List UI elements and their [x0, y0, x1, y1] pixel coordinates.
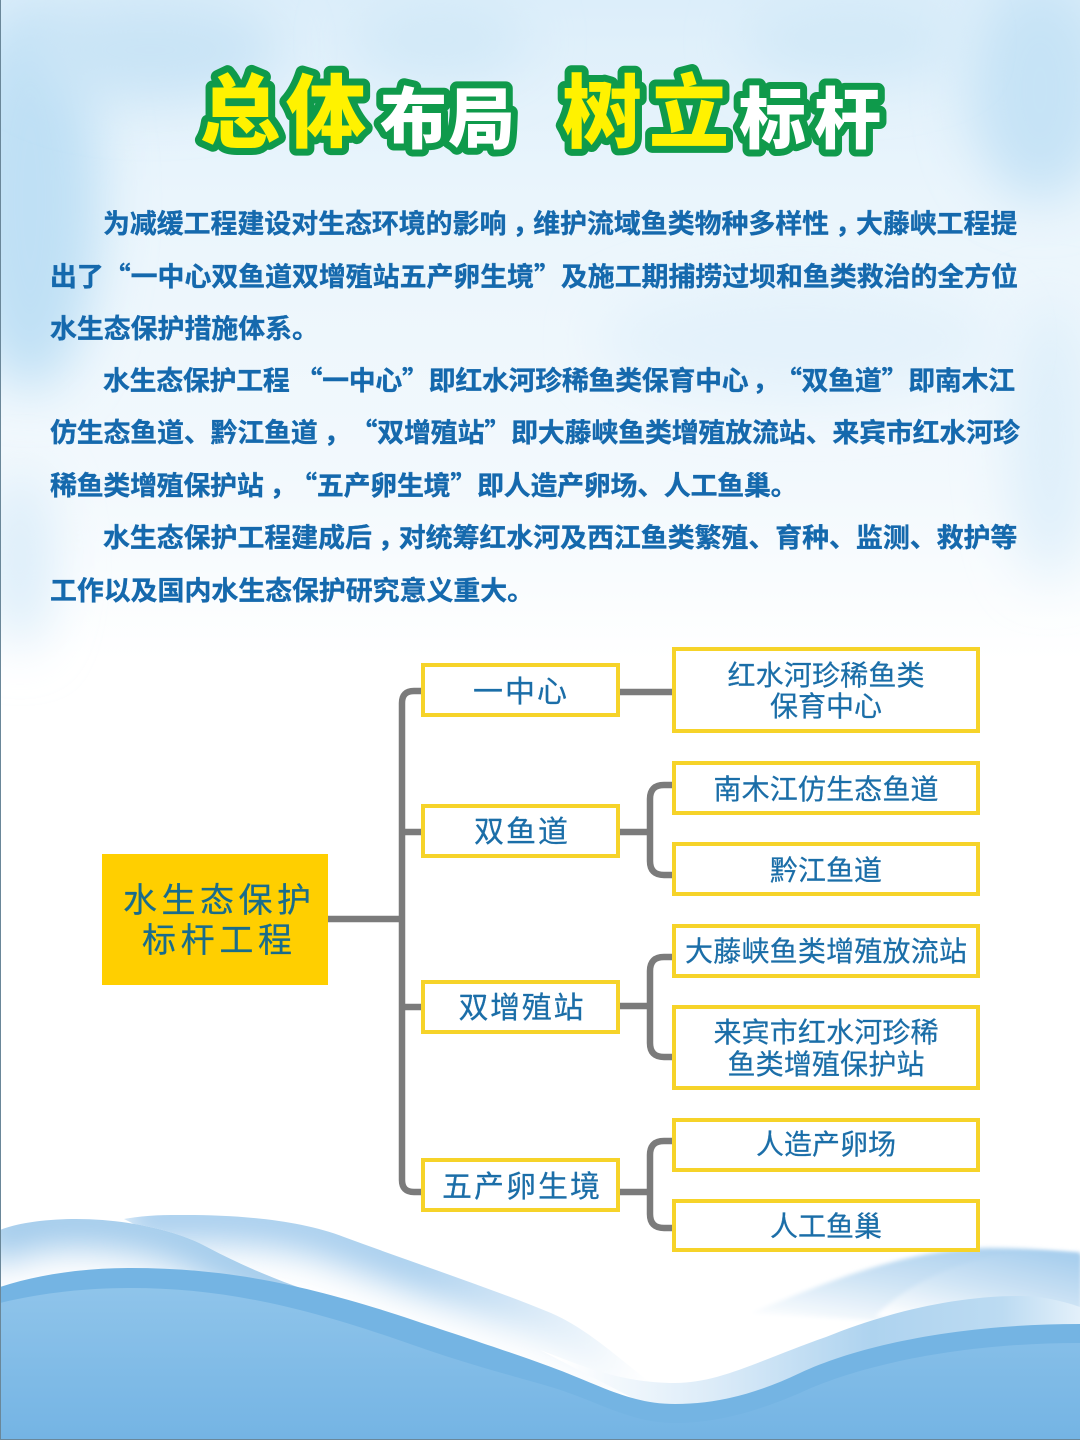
leaf: 南木江仿生态鱼道	[674, 763, 978, 813]
leaf: 大藤峡鱼类增殖放流站: 大藤峡鱼类增殖放流站	[685, 930, 967, 970]
tree diagram	[102, 649, 978, 1250]
connector: level 2 to level 3	[619, 692, 673, 1228]
leaf: 人工鱼巢	[674, 1201, 978, 1250]
wave: main dark	[0, 1268, 1080, 1440]
node: 五产卵生境: 五产卵生境	[442, 1162, 600, 1206]
background: watercolor sky	[0, 0, 1080, 660]
leaf: 人造产卵场	[674, 1120, 978, 1170]
background: waves at bottom	[0, 1210, 1080, 1440]
node: 双增殖站	[423, 982, 618, 1032]
leaf: 来宾市红水河珍稀鱼类增殖保护站: 来宾市红水河珍稀	[714, 1011, 938, 1051]
node: 一中心	[423, 665, 618, 715]
text block: measures: 水生态保护工程“一中心”即红水河珍稀鱼类保育中心，“双鱼道”即南木江	[103, 359, 1015, 398]
wave: left back	[1, 1219, 299, 1288]
text block: measures: 仿生态鱼道、黔江鱼道，“双增殖站”即大藤峡鱼类增殖放流站、来宾市红水河珍	[50, 411, 1020, 450]
title: 布局	[380, 66, 515, 163]
leaf: 南木江仿生态鱼道: 南木江仿生态鱼道	[714, 768, 938, 808]
leaf: 红水河珍稀鱼类保育中心: 红水河珍稀鱼类	[728, 654, 924, 694]
leaf: 红水河珍稀鱼类保育中心	[674, 649, 978, 731]
text block: introduction: 出了“一中心双鱼道双增殖站五产卵生境”及施工期捕捞过坝和鱼类救治的全方位	[50, 255, 1018, 294]
leaf: 红水河珍稀鱼类保育中心: 保育中心	[770, 685, 882, 725]
wave: middle back	[124, 1215, 617, 1372]
wave: valley front	[540, 1296, 1080, 1420]
connector: spine	[328, 691, 423, 1192]
title: 树立	[562, 49, 729, 165]
root box: 水生态保护	[123, 873, 311, 922]
text block: measures: 稀鱼类增殖保护站，“五产卵生境”即人造产卵场、人工鱼巢。	[50, 464, 797, 503]
leaf: 黔江鱼道	[674, 844, 978, 894]
text block: significance	[50, 516, 1017, 608]
leaf: 来宾市红水河珍稀鱼类增殖保护站: 鱼类增殖保护站	[728, 1043, 924, 1083]
node: 一中心: 一中心	[473, 667, 567, 711]
wave: lighter inner	[0, 1288, 1080, 1440]
leaf: 来宾市红水河珍稀鱼类增殖保护站	[674, 1007, 978, 1088]
wave: right back A	[750, 1248, 1080, 1322]
leaf: 黔江鱼道: 黔江鱼道	[770, 849, 882, 889]
node: 双增殖站: 双增殖站	[458, 983, 584, 1027]
title	[200, 49, 881, 165]
leaf: 人造产卵场: 人造产卵场	[756, 1123, 896, 1163]
wave: right back B	[875, 1252, 1080, 1317]
title: 标杆	[739, 66, 881, 163]
text block: introduction: 水生态保护措施体系。	[50, 307, 319, 346]
node: 双鱼道	[423, 806, 618, 856]
text block: introduction: 为减缓工程建设对生态环境的影响，维护流域鱼类物种多样性，大藤峡工程提	[103, 202, 1017, 241]
text block: measures	[50, 359, 1020, 503]
text block: significance: 水生态保护工程建成后，对统筹红水河及西江鱼类繁殖、育种、监测、救护等	[103, 516, 1017, 555]
text block: introduction	[50, 202, 1018, 346]
root box: 标杆工程	[142, 913, 292, 962]
title: 总体	[200, 49, 366, 165]
root box	[102, 854, 328, 985]
node: 双鱼道: 双鱼道	[474, 807, 568, 851]
text block: significance: 工作以及国内水生态保护研究意义重大。	[50, 569, 534, 608]
leaf: 人工鱼巢: 人工鱼巢	[770, 1205, 882, 1245]
